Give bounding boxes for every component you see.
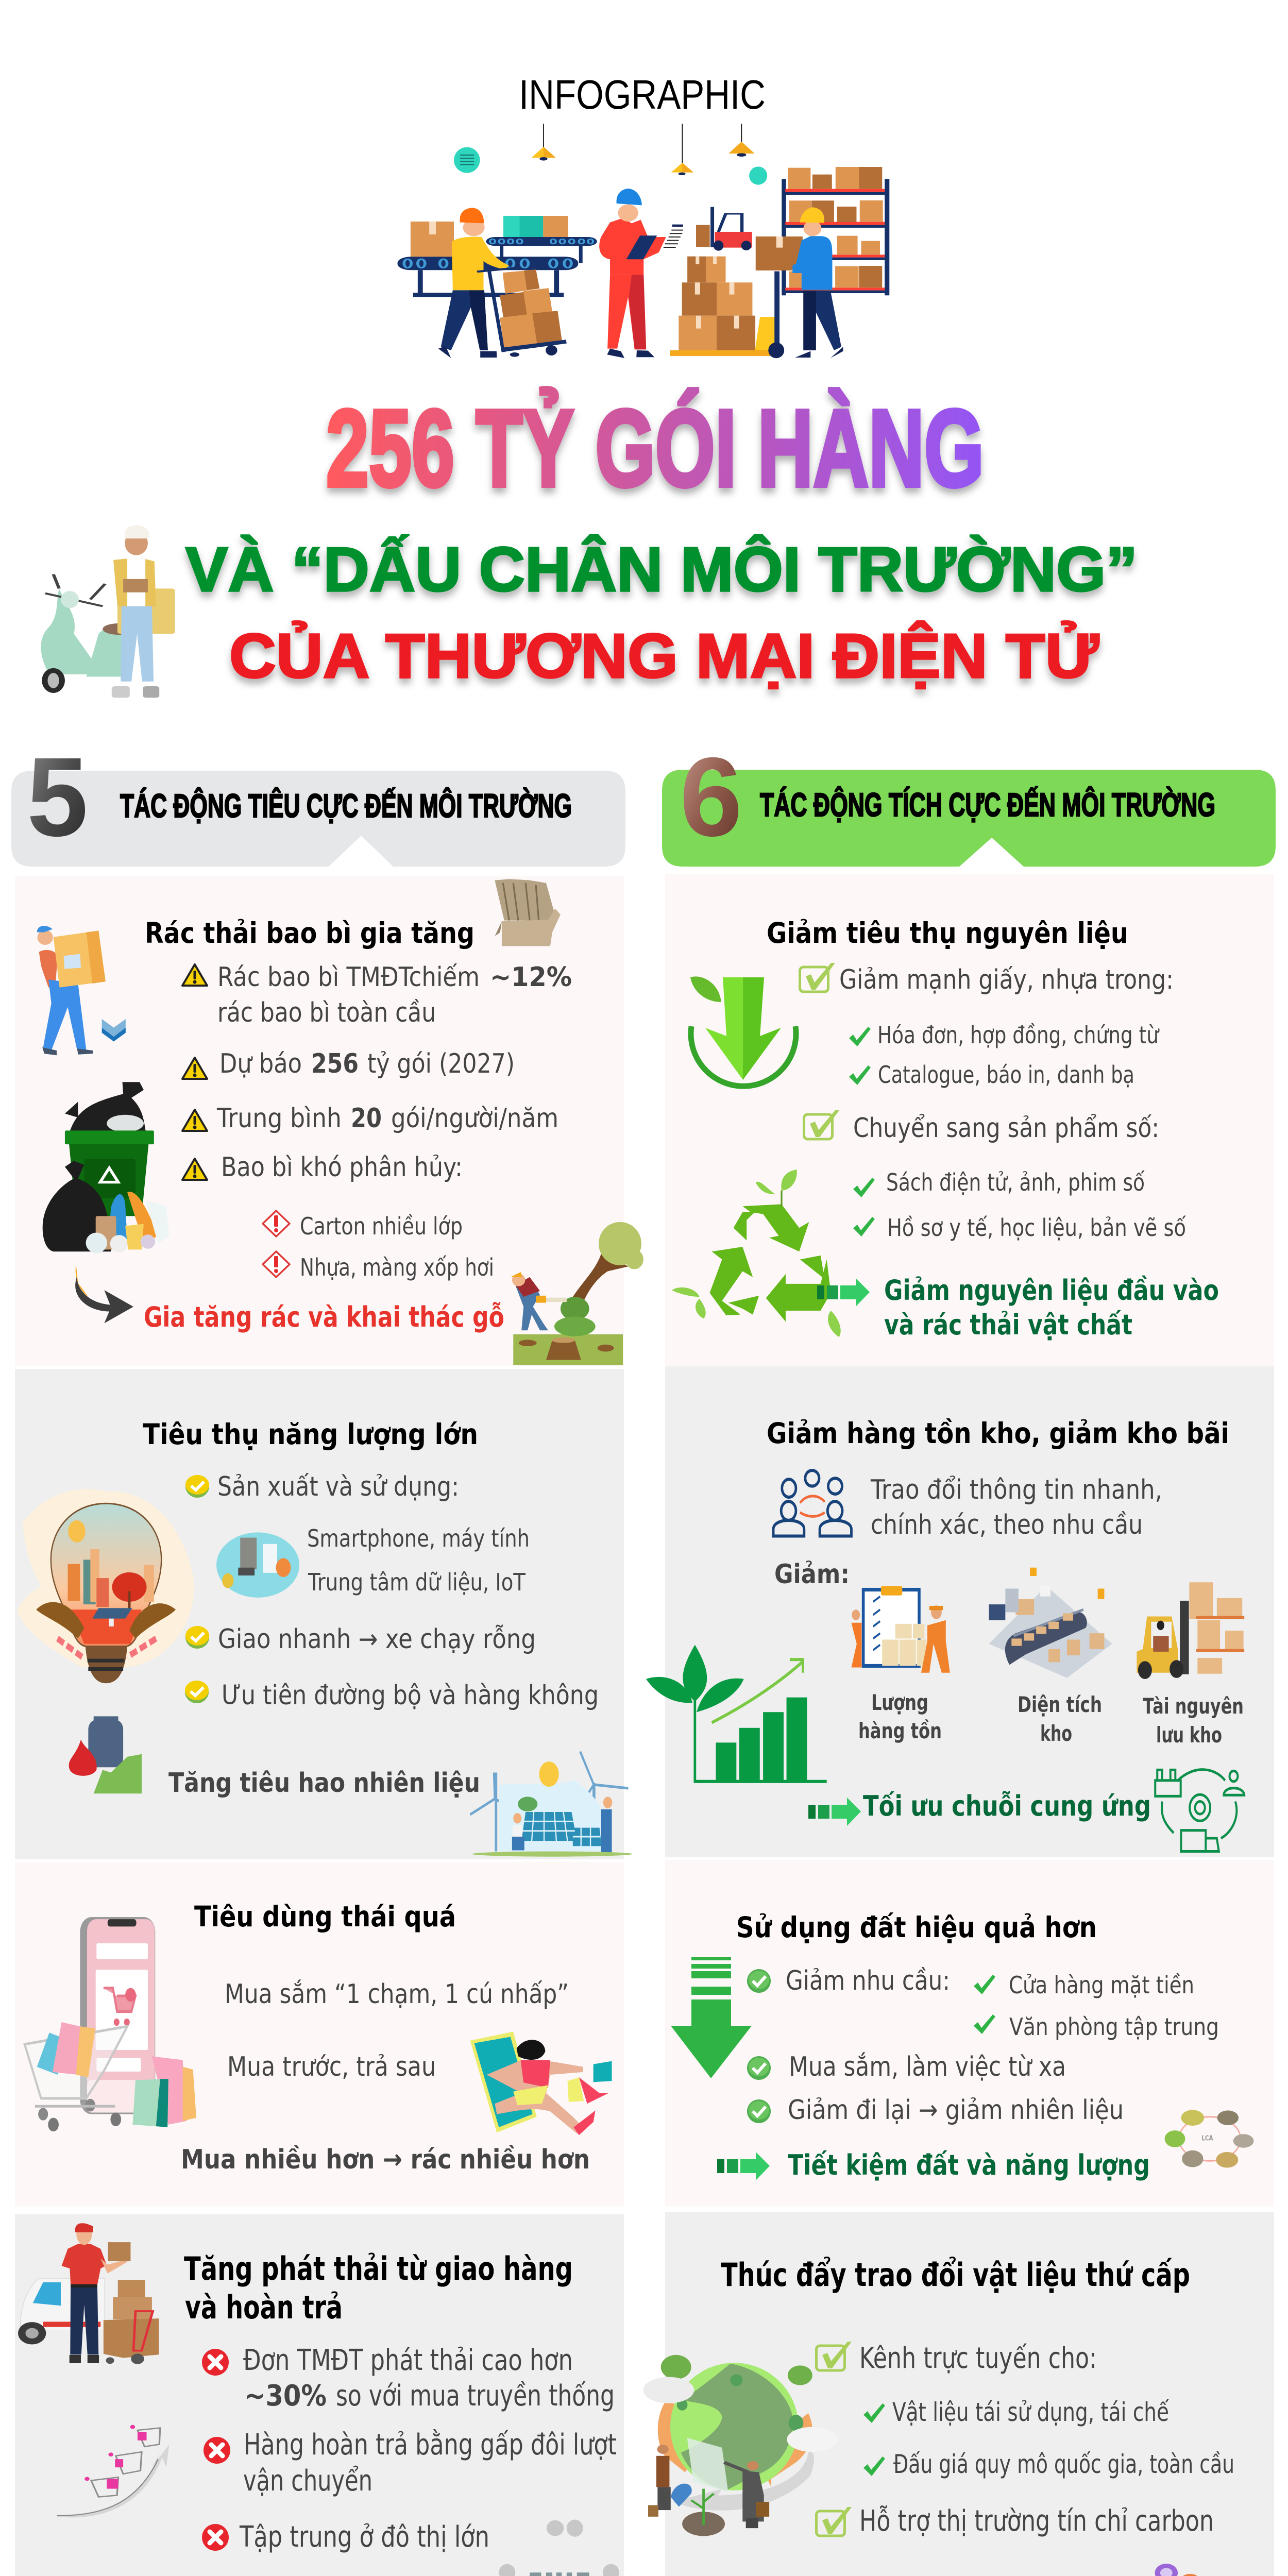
conclusion: Tối ưu chuỗi cung ứng xyxy=(863,1790,1151,1822)
heading text: TÁC ĐỘNG TIÊU CỰC ĐẾN MÔI TRƯỜNG xyxy=(120,787,572,824)
bullet list: Nhựa, màng xốp hơi xyxy=(300,1253,494,1281)
heading: Tăng phát thải từ giao hàng xyxy=(184,2250,573,2287)
bullets: Vật liệu tái sử dụng, tái chế xyxy=(892,2397,1169,2427)
arrow xyxy=(808,1798,861,1826)
arrow xyxy=(817,1278,870,1307)
bullet list: Carton nhiều lớp xyxy=(300,1212,463,1240)
panel: material reduction xyxy=(665,874,1274,1366)
bullets: Mua sắm “1 chạm, 1 cú nhấp” xyxy=(225,1979,569,2010)
icon: LCA cycle: LCA xyxy=(1201,2134,1213,2142)
bullet list: rác bao bì toàn cầu xyxy=(217,997,436,1028)
heading: Giảm tiêu thụ nguyên liệu xyxy=(767,917,1128,950)
illustrations xyxy=(646,1470,1244,1852)
panel: inventory reduction xyxy=(646,1366,1274,1857)
icon: down arrow xyxy=(671,1957,752,2078)
label: reduce: Giảm: xyxy=(774,1559,850,1590)
bullet list: Bao bì khó phân hủy: xyxy=(221,1152,463,1183)
bullets: Mua sắm, làm việc từ xa xyxy=(789,2052,1066,2082)
heading: Giảm hàng tồn kho, giảm kho bãi xyxy=(767,1417,1229,1450)
bullet list: Hồ sơ y tế, học liệu, bản vẽ số xyxy=(887,1214,1186,1242)
item labels: Diện tích xyxy=(1018,1692,1102,1717)
arrow xyxy=(717,2152,770,2180)
panel: delivery emissions xyxy=(15,2214,642,2576)
illustration: warehouse workers xyxy=(398,124,889,358)
illustration: globe with factories xyxy=(477,2520,642,2576)
icon illustrations xyxy=(37,879,643,1365)
title: 256 tỷ gói hàng: 256 TỶ GÓI HÀNG xyxy=(326,387,984,509)
icon: recycling leaves xyxy=(672,1170,841,1337)
item labels: Lượng xyxy=(871,1690,928,1715)
bullet list: Giảm mạnh giấy, nhựa trong: xyxy=(839,964,1174,995)
panel: energy use xyxy=(15,1369,632,1859)
heading: Rác thải bao bì gia tăng xyxy=(145,917,474,950)
illustration: delivery man with scooter xyxy=(41,525,175,698)
bullet list: Dự báo xyxy=(219,1048,302,1079)
heading: và hoàn trả xyxy=(185,2289,343,2326)
number 5: 5 xyxy=(27,735,88,860)
right column heading: 6 positive impacts xyxy=(662,735,1276,867)
conclusion: Mua nhiều hơn → rác nhiều hơn xyxy=(181,2144,590,2175)
conclusion: Giảm nguyên liệu đầu vào xyxy=(884,1274,1219,1307)
bullets: ~30% xyxy=(244,2379,327,2413)
conclusion: và rác thải vật chất xyxy=(884,1309,1132,1341)
panel: land use xyxy=(665,1860,1274,2207)
bullet list xyxy=(182,962,572,1281)
item labels xyxy=(858,1690,1244,1748)
bullets xyxy=(816,2342,1234,2538)
bullet list: Trung bình xyxy=(216,1103,342,1134)
bullet list: tỷ gói (2027) xyxy=(367,1048,515,1079)
panel: overconsumption xyxy=(15,1862,624,2207)
bullets: Giảm đi lại → giảm nhiên liệu xyxy=(788,2095,1124,2126)
bullets xyxy=(202,2344,617,2554)
bullet list: 256 xyxy=(311,1048,359,1079)
bullet list: Sản xuất và sử dụng: xyxy=(217,1471,459,1502)
heading: Tiêu dùng thái quá xyxy=(194,1900,456,1933)
illustrations xyxy=(643,2355,1223,2576)
bullet list: ~12% xyxy=(490,962,572,993)
panel: secondary materials xyxy=(643,2212,1274,2576)
bullets: so với mua truyền thống xyxy=(336,2379,615,2413)
item labels: hàng tồn xyxy=(858,1718,942,1743)
bullets: Văn phòng tập trung xyxy=(1009,2013,1219,2041)
bullet list xyxy=(800,963,1186,1242)
description: chính xác, theo nhu cầu xyxy=(871,1510,1143,1540)
bullet list: Hóa đơn, hợp đồng, chứng từ xyxy=(877,1021,1160,1049)
bullet list: Chuyển sang sản phẩm số: xyxy=(853,1113,1159,1144)
illustrations xyxy=(17,1489,632,1857)
heading: Sử dụng đất hiệu quả hơn xyxy=(736,1911,1097,1944)
heading: Tiêu thụ năng lượng lớn xyxy=(143,1418,478,1451)
bullets: Kênh trực tuyến cho: xyxy=(859,2342,1097,2375)
bullet list: Rác bao bì TMĐTchiếm xyxy=(217,962,480,993)
item labels: Tài nguyên xyxy=(1143,1693,1244,1719)
bullets: Hàng hoàn trả bằng gấp đôi lượt xyxy=(244,2428,617,2462)
title: dấu chân môi trường: VÀ “DẤU CHÂN MÔI TRƯỜNG” xyxy=(185,534,1138,604)
bullets xyxy=(225,1979,569,2082)
bullets xyxy=(747,1965,1219,2126)
bullets: Cửa hàng mặt tiền xyxy=(1009,1971,1194,1999)
title: của thương mại điện tử: CỦA THƯƠNG MẠI ĐIỆN TỬ xyxy=(229,621,1099,691)
bullet list: Catalogue, báo in, danh bạ xyxy=(878,1061,1134,1089)
label: INFOGRAPHIC: INFOGRAPHIC xyxy=(519,72,766,117)
bullet list xyxy=(185,1471,599,1711)
heading xyxy=(184,2250,573,2326)
bullet list: Smartphone, máy tính xyxy=(307,1524,530,1552)
bullets: Đơn TMĐT phát thải cao hơn xyxy=(243,2344,573,2377)
conclusion: Tăng tiêu hao nhiên liệu xyxy=(168,1768,480,1799)
illustrations xyxy=(25,1917,612,2135)
panel: packaging waste xyxy=(15,876,643,1366)
bullet list: Giao nhanh → xe chạy rỗng xyxy=(218,1624,536,1655)
bullet list: Trung tâm dữ liệu, IoT xyxy=(308,1568,526,1596)
item labels: lưu kho xyxy=(1156,1722,1222,1748)
illustrations xyxy=(18,2223,169,2576)
item labels: kho xyxy=(1040,1721,1072,1746)
bullet list: gói/người/năm xyxy=(391,1103,558,1134)
bullet list: Sách điện tử, ảnh, phim số xyxy=(886,1168,1145,1196)
bullets: vận chuyển xyxy=(243,2464,372,2498)
bullets: Tập trung ở đô thị lớn xyxy=(239,2520,489,2554)
bullets: Mua trước, trả sau xyxy=(227,2052,436,2082)
icon: LCA cycle xyxy=(1165,2110,1254,2168)
conclusion xyxy=(884,1274,1219,1341)
bullets: Giảm nhu cầu: xyxy=(786,1965,950,1996)
bullet list: 20 xyxy=(351,1103,382,1134)
bullet list: Ưu tiên đường bộ và hàng không xyxy=(222,1680,599,1711)
left column heading: 5 negative impacts xyxy=(11,735,625,867)
conclusion: Tiết kiệm đất và năng lượng xyxy=(788,2149,1150,2181)
number 6: 6 xyxy=(680,735,742,860)
icon: down arrow with leaf xyxy=(690,976,796,1086)
description: Trao đổi thông tin nhanh, xyxy=(870,1475,1162,1505)
conclusion: Gia tăng rác và khai thác gỗ xyxy=(144,1301,504,1333)
description xyxy=(870,1475,1162,1540)
